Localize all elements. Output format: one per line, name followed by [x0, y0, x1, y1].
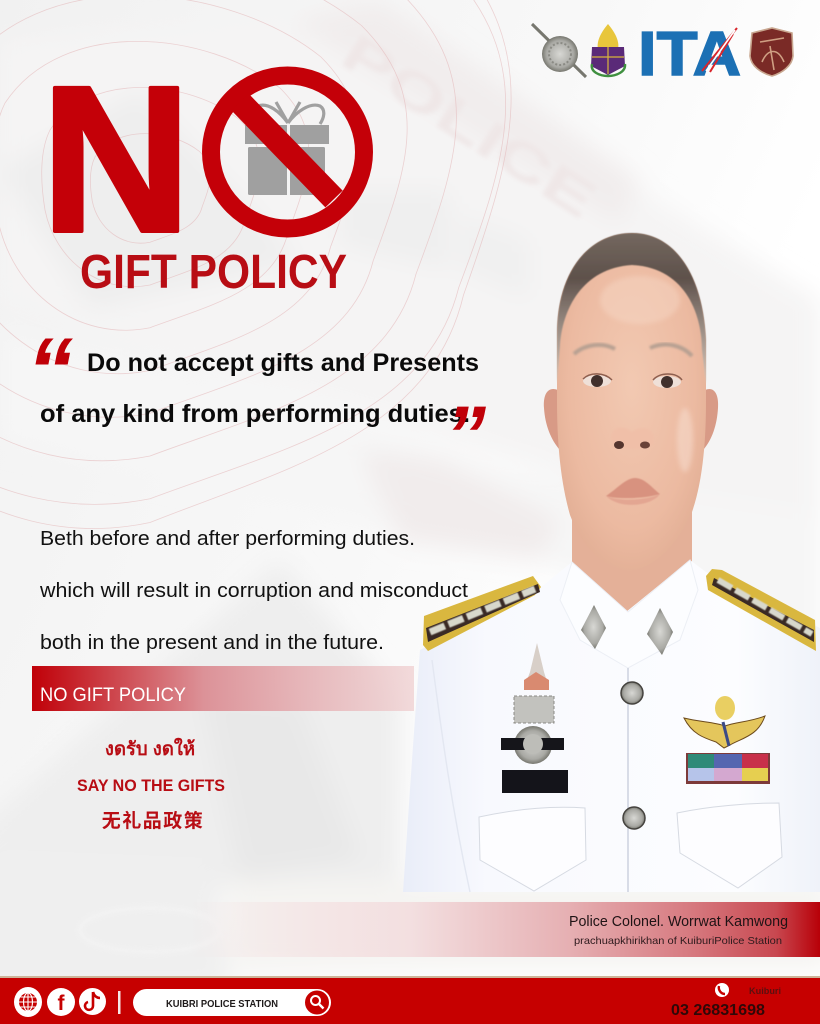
footer bar	[0, 976, 820, 1024]
banner: no gift policy	[32, 666, 414, 711]
logos row	[532, 20, 793, 89]
body text: both in the present and in the future.	[40, 632, 384, 654]
collar pins	[581, 605, 673, 655]
footer bar: Kuiburi	[749, 986, 781, 996]
placket line	[627, 668, 629, 892]
mouth	[606, 478, 660, 505]
logo: ITA: ITA	[638, 20, 741, 89]
ears	[544, 389, 718, 450]
logo: purple and gold crest	[591, 24, 625, 76]
uniform torso	[403, 560, 820, 892]
signature band: Police Colonel. Worrwat Kamwong	[569, 913, 788, 930]
right epaulette	[706, 569, 816, 651]
quote block: Do not accept gifts and Presents	[87, 349, 479, 377]
medal	[524, 643, 549, 690]
icon: gift box	[245, 102, 329, 195]
decorative contour lines	[0, 0, 511, 528]
ribbon bars	[686, 753, 770, 784]
collar	[560, 560, 698, 668]
hair	[557, 233, 706, 384]
body text	[39, 528, 468, 654]
silver badge	[514, 696, 554, 723]
multilingual slogans	[77, 737, 225, 832]
name tag	[502, 770, 568, 793]
portrait: officer in white uniform	[403, 233, 820, 892]
signature band	[190, 902, 820, 957]
facial features	[574, 276, 693, 505]
closing quote mark: ”	[445, 390, 486, 481]
icon: NO with prohibited gift	[41, 44, 364, 276]
icon: globe	[14, 987, 42, 1017]
logo: police shield with baton	[532, 24, 586, 77]
black bar insignia	[501, 726, 564, 764]
eyebrows	[574, 345, 692, 356]
signature band: prachuapkhirikhan of KuiburiPolice Station	[574, 935, 782, 947]
neck	[572, 500, 692, 625]
heading: gift policy: GIFT POLICY	[80, 246, 347, 299]
face	[557, 233, 706, 571]
search pill: KUIBRI POLICE STATION	[166, 999, 278, 1010]
icon: tiktok	[79, 988, 106, 1015]
icon: search	[305, 990, 329, 1014]
opening quote mark: “	[27, 320, 73, 422]
icon: prohibition sign	[211, 76, 364, 228]
left pocket	[479, 807, 586, 891]
multilingual slogans: งดรับ งดให้	[105, 737, 195, 759]
banner: no gift policy: NO GIFT POLICY	[40, 685, 186, 706]
forehead and cheek highlights	[600, 276, 680, 324]
left epaulette	[423, 576, 541, 651]
wings badge	[684, 696, 765, 748]
big letter N: N	[41, 44, 191, 276]
search pill	[133, 989, 331, 1016]
body text: which will result in corruption and misconduct	[39, 580, 468, 602]
multilingual slogans: 无礼品政策	[102, 810, 204, 832]
icon: phone	[715, 983, 729, 997]
nose	[611, 427, 654, 449]
background: blurred police station photo: POLICE	[331, 23, 606, 230]
quote block	[27, 320, 486, 481]
eyes	[583, 374, 682, 388]
multilingual slogans: SAY NO THE GIFTS	[77, 776, 225, 795]
logo: maroon shield	[750, 28, 793, 76]
body text: Beth before and after performing duties.	[40, 528, 415, 550]
quote block: of any kind from performing duties.	[40, 400, 470, 428]
buttons	[621, 682, 645, 829]
icon: facebook: f	[58, 992, 66, 1015]
footer bar: 03 26831698	[671, 1002, 765, 1019]
right pocket	[677, 803, 782, 888]
icon: facebook	[47, 988, 75, 1016]
